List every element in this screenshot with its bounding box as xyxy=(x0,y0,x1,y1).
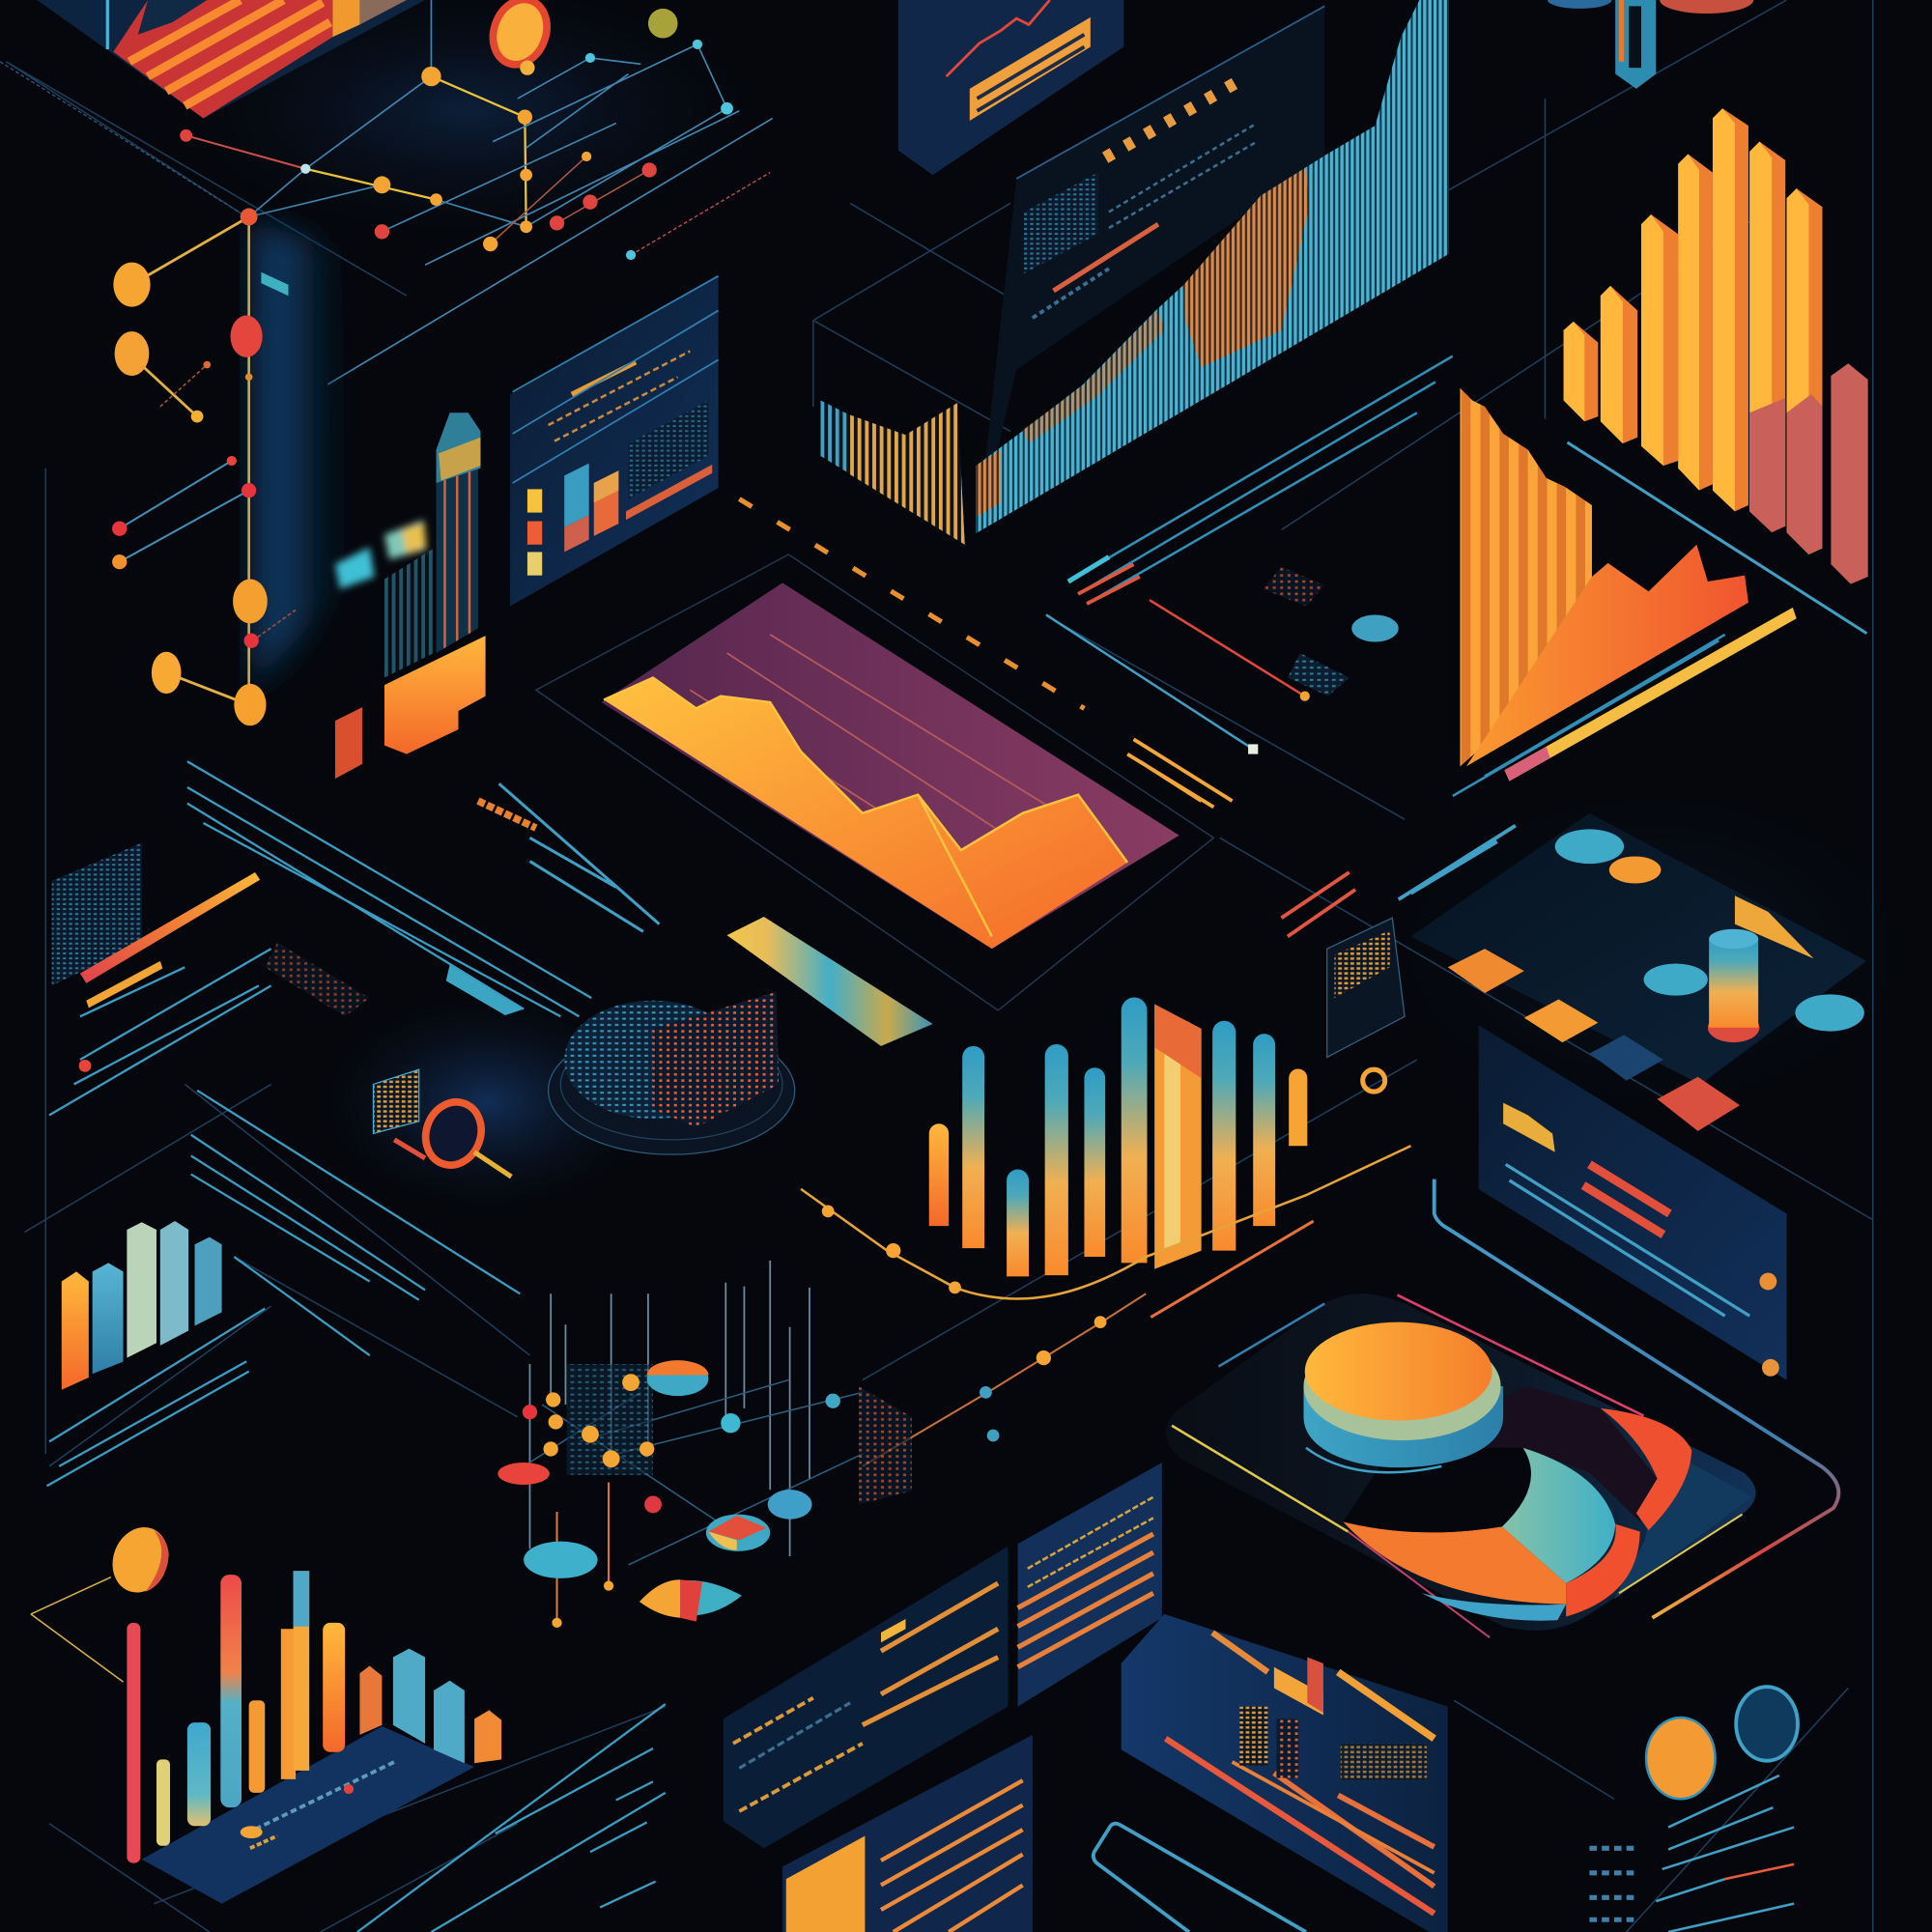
panel: central purple area chart xyxy=(601,582,1179,949)
panel: bottom-right wide card xyxy=(1122,1614,1448,1932)
chart: bottom network with discs xyxy=(497,1261,912,1628)
icon: orange balloon xyxy=(103,1520,178,1601)
icon: cylinder disc xyxy=(1303,1322,1503,1472)
icon: top ring xyxy=(484,0,555,72)
panel: left vertical network xyxy=(112,209,352,725)
icons: bottom-right coins xyxy=(1589,1687,1798,1932)
icon: orange ring with card xyxy=(373,1069,511,1177)
outline: outer teal frame xyxy=(1435,1179,1838,1618)
small labels xyxy=(261,272,288,296)
icon panel: left small dotted card xyxy=(52,842,142,985)
chart: bottom-left bars xyxy=(31,1520,501,1904)
panel: right navy text card xyxy=(1479,1025,1786,1380)
icons: node circles xyxy=(112,209,268,725)
chart: pie xyxy=(1343,1386,1691,1621)
chart: large rising bars xyxy=(976,0,1449,536)
frame: bottom outlined box xyxy=(1094,1824,1306,1932)
area: orange mountain xyxy=(1466,545,1748,766)
icon: top keyhole xyxy=(1548,0,1753,89)
blurred tags xyxy=(335,520,426,589)
panels: bottom centre text cards xyxy=(724,1463,1162,1932)
timeline: orange curve xyxy=(801,1146,1410,1466)
chart: orange triangle bars xyxy=(1046,356,1866,796)
panel: top-left stripes platform xyxy=(106,0,407,118)
chart: central vertical bars xyxy=(929,998,1307,1276)
chart: cylinder xyxy=(1708,929,1759,1042)
card: orange tag xyxy=(384,636,486,754)
chart: right isometric orange bars xyxy=(1564,108,1868,584)
background glows xyxy=(37,0,1910,1208)
text block: panel labels xyxy=(1024,81,1257,318)
area: yellow-orange mountain xyxy=(604,678,1127,949)
card: gradient strip xyxy=(727,917,933,1046)
panel: top line chart xyxy=(898,0,1123,175)
icon: small yellow node xyxy=(520,60,535,75)
callouts: diagonal bars around centre xyxy=(446,739,1516,1046)
chart: left tower with stripes xyxy=(335,412,486,779)
top network xyxy=(0,0,773,384)
left line bundles xyxy=(46,761,666,1932)
panel: small dashboard xyxy=(510,276,719,607)
icon: top coin xyxy=(648,9,678,39)
dashed marker line xyxy=(739,499,1084,708)
chart: left mini bars xyxy=(62,1221,222,1390)
chart: small striped bars xyxy=(820,401,965,545)
panel: bottom-right device xyxy=(1166,1179,1838,1637)
icon: ring pendant with card xyxy=(1327,918,1405,1092)
bars: left gradient lines xyxy=(79,872,370,1072)
dish: central data hologram xyxy=(549,992,795,1154)
panel: right dark diamond xyxy=(1410,813,1866,1131)
